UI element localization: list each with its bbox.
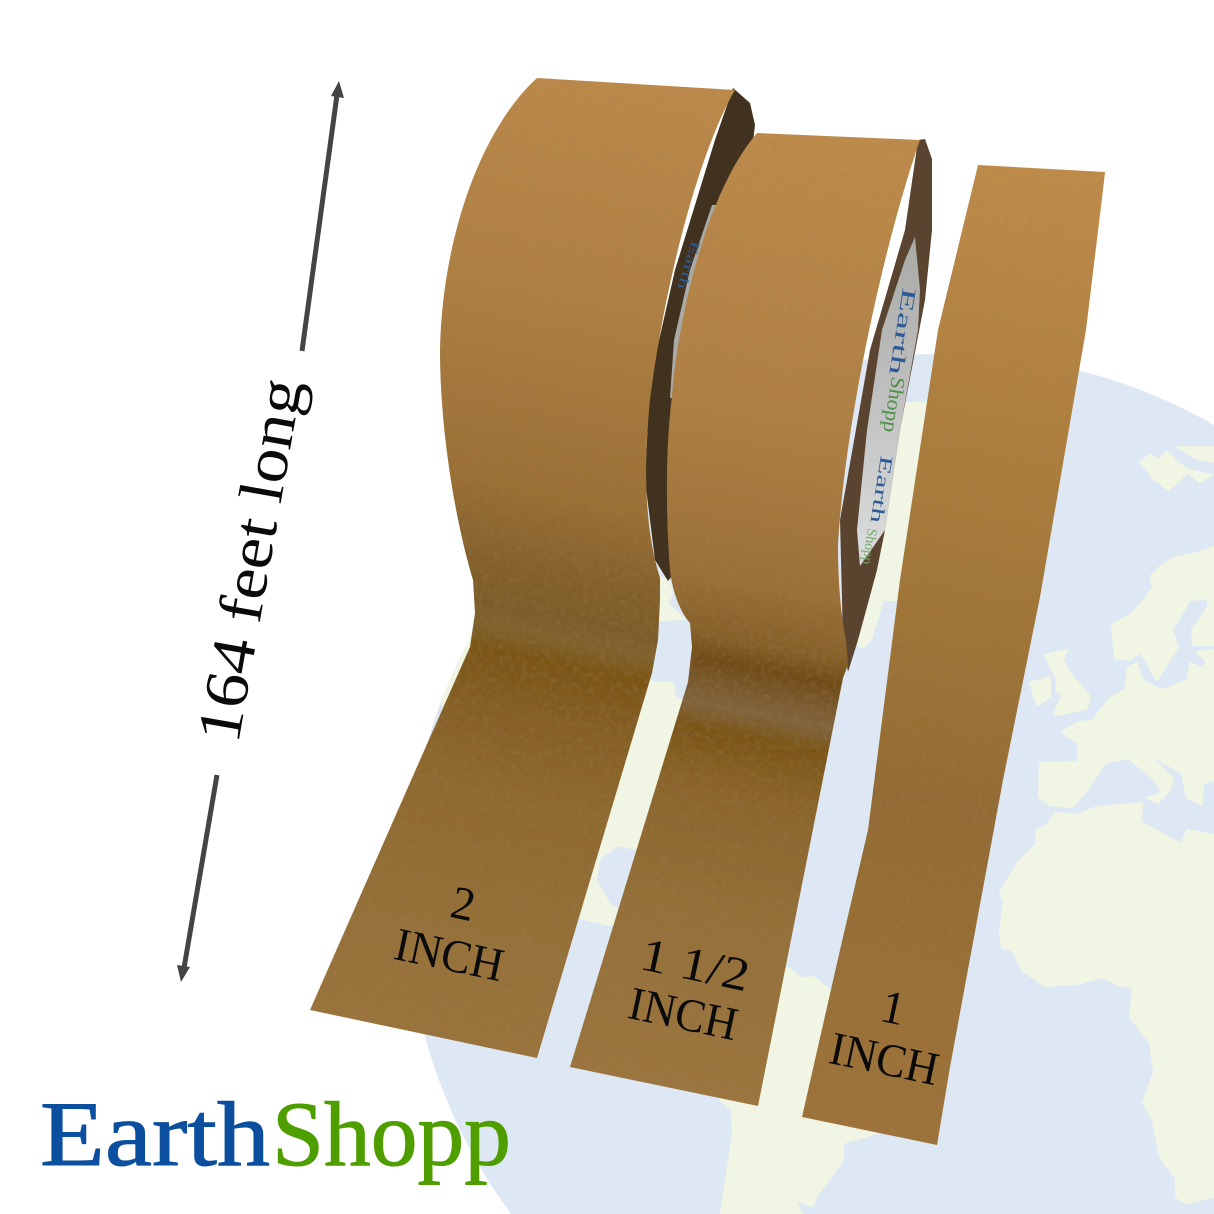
ireland xyxy=(1030,677,1050,705)
tape roll: 2 inch xyxy=(310,78,755,1058)
size label: 1 1/2 inch xyxy=(624,928,754,1051)
number 1 1/2: 1 1/2 xyxy=(636,928,754,1002)
core of 1.5 inch roll xyxy=(857,237,920,566)
north america xyxy=(440,636,682,926)
core label green: Shopp xyxy=(878,375,909,434)
scandinavia xyxy=(1112,547,1214,680)
core of 2 inch roll xyxy=(670,205,722,398)
greenland xyxy=(856,402,927,649)
lower arrow head xyxy=(177,965,190,982)
globe continents xyxy=(400,403,1214,1214)
number 2: 2 xyxy=(446,876,480,932)
core label blue lower: Earth xyxy=(866,454,897,525)
south america xyxy=(720,967,877,1214)
core label blue upper: Earth xyxy=(884,286,920,377)
length label: 164 feet long xyxy=(185,373,316,747)
number 1: 1 xyxy=(876,980,910,1036)
upper arrow head xyxy=(331,81,344,98)
side of 2 inch roll xyxy=(645,88,755,581)
lower arrow shaft xyxy=(184,775,217,968)
size label: 1 inch xyxy=(825,980,943,1096)
finland xyxy=(1192,598,1214,645)
logo word earth: Earth xyxy=(40,1083,270,1185)
great britain xyxy=(1045,650,1090,715)
brand logo xyxy=(40,1083,511,1185)
svalbard xyxy=(1140,447,1214,490)
globe ocean xyxy=(406,354,1214,1214)
word inch: INCH xyxy=(825,1022,943,1096)
north america upper sliver xyxy=(659,576,685,621)
logo word shopp: Shopp xyxy=(272,1083,511,1185)
core label green lower: Shopp xyxy=(858,527,879,565)
word inch: INCH xyxy=(390,918,508,992)
background globe xyxy=(400,354,1214,1214)
core print on 2 inch roll: Earth xyxy=(674,239,703,292)
size label: 2 inch xyxy=(390,876,508,992)
tape body 2 inch xyxy=(310,78,735,1058)
tape roll: 1 1/2 inch xyxy=(570,133,932,1106)
africa xyxy=(1000,803,1214,1203)
tape body 1.5 inch xyxy=(570,133,920,1106)
word inch: INCH xyxy=(624,977,742,1051)
length arrow xyxy=(177,81,344,982)
mainland europe xyxy=(1039,650,1214,807)
side of 1.5 inch roll xyxy=(840,139,932,672)
upper arrow shaft xyxy=(302,95,337,351)
tape strip: 1 inch xyxy=(802,165,1105,1145)
core print text xyxy=(858,286,920,565)
